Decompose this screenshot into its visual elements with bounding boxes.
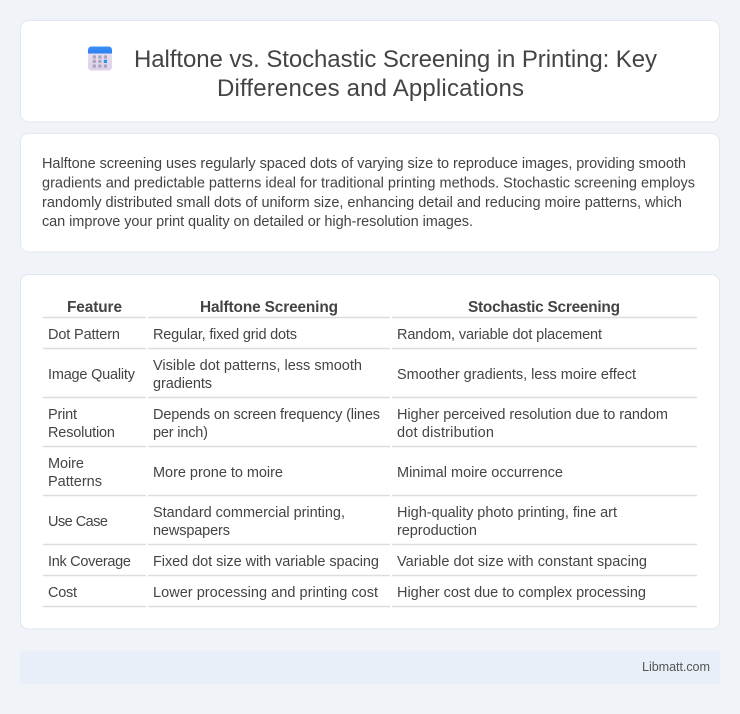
row: ink coverage: Fixed dot size with variable spacing	[153, 554, 379, 570]
title: Halftone vs. Stochastic Screening in Printing: Key	[134, 46, 657, 73]
row: image quality: Smoother gradients, less moire effect	[397, 367, 636, 383]
row: cost	[48, 585, 646, 601]
row: image quality: gradients	[153, 376, 212, 392]
row: print resolution	[48, 407, 668, 441]
row: print resolution: Resolution	[48, 425, 115, 441]
title	[134, 46, 657, 102]
row: moire patterns: Patterns	[48, 474, 102, 490]
row: cost: Higher cost due to complex processing	[397, 585, 646, 601]
text block: introduction: can improve your print quality on detailed or high-resolution images.	[42, 214, 473, 230]
row: cost: Lower processing and printing cost	[153, 585, 378, 601]
row: use case: reproduction	[397, 523, 477, 539]
text block: introduction	[42, 156, 695, 230]
text block: introduction: Halftone screening uses regularly spaced dots of varying size to reproduce images, providing smooth	[42, 156, 686, 172]
row: print resolution: Higher perceived resolution due to random	[397, 407, 668, 423]
row: use case: newspapers	[153, 523, 230, 539]
row: moire patterns	[48, 456, 563, 490]
row: use case: High-quality photo printing, fine art	[397, 505, 617, 521]
title: Differences and Applications	[217, 75, 524, 102]
footer	[20, 651, 720, 684]
row: use case	[48, 505, 617, 539]
row: print resolution: Depends on screen frequency (lines	[153, 407, 380, 423]
row: moire patterns: Moire	[48, 456, 84, 472]
table header: Halftone Screening	[200, 299, 338, 316]
row: image quality: Image Quality	[48, 367, 136, 383]
row: print resolution: dot distribution	[397, 425, 494, 441]
panel: title card	[20, 20, 720, 122]
row: use case: Standard commercial printing,	[153, 505, 345, 521]
row: ink coverage: Variable dot size with constant spacing	[397, 554, 647, 570]
panel: introduction	[20, 134, 720, 252]
row: ink coverage	[48, 554, 647, 570]
row: image quality: Visible dot patterns, less smooth	[153, 358, 362, 374]
table header: Stochastic Screening	[468, 299, 620, 316]
row: dot pattern	[48, 327, 602, 343]
row: ink coverage: Ink Coverage	[48, 554, 131, 570]
table header: Feature	[67, 299, 122, 316]
row: moire patterns: Minimal moire occurrence	[397, 465, 563, 481]
row: dot pattern: Dot Pattern	[48, 327, 120, 343]
row: print resolution: Print	[48, 407, 77, 423]
footer source text: Libmatt.com	[642, 660, 710, 674]
row: print resolution: per inch)	[153, 425, 208, 441]
text block: introduction: randomly distributed small dots of uniform size, enhancing detail and reducing moire patterns, which	[42, 195, 682, 211]
row: dot pattern: Random, variable dot placement	[397, 327, 602, 343]
text block: introduction: gradients and predictable patterns ideal for traditional printing methods. Stochastic screening employs	[42, 176, 695, 192]
table header	[67, 299, 620, 316]
row: dot pattern: Regular, fixed grid dots	[153, 327, 297, 343]
icon: calendar	[88, 46, 112, 70]
row: cost: Cost	[48, 585, 77, 601]
row: use case: Use Case	[48, 514, 108, 530]
row: moire patterns: More prone to moire	[153, 465, 283, 481]
row: image quality	[48, 358, 636, 392]
panel: comparison table	[20, 274, 720, 629]
